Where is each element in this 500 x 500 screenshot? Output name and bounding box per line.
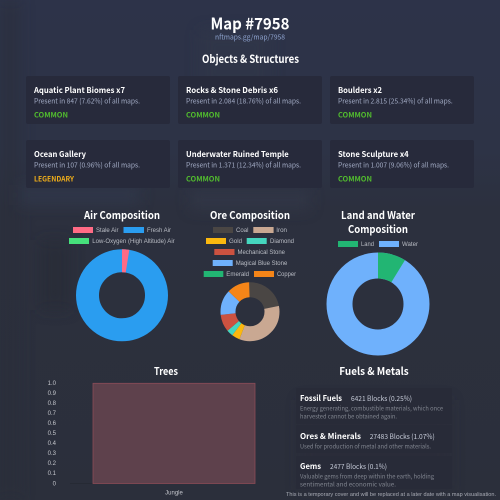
card: gems: Valuable gems from deep within the earth, holding (300, 471, 435, 480)
card: fossil fuels (296, 388, 452, 424)
card: underwater ruined temple: Present in 1.371 (12.34%) of all maps. (186, 160, 301, 170)
panel: objects and structures cards (26, 76, 474, 188)
card: ocean gallery: Ocean Gallery (34, 149, 86, 160)
legend: land and water: Land (361, 241, 374, 248)
card: stone sculpture: Present in 1.007 (9.06%) of all maps. (338, 160, 449, 170)
heading: trees: Trees (154, 364, 178, 379)
panel: fuels and metals (296, 364, 452, 489)
card: aquatic plant biomes: Aquatic Plant Biomes x7 (33, 85, 125, 96)
heading: air composition: Air Composition (83, 208, 160, 223)
bar chart: trees: Jungle (165, 490, 184, 496)
card: fossil fuels: harvested cannot be obtained again. (300, 412, 397, 421)
card: boulders: Boulders x2 (338, 85, 382, 96)
card: underwater ruined temple (178, 140, 322, 188)
card: ores and minerals: Ores & Minerals (300, 431, 361, 442)
panel: land and water composition (338, 208, 419, 342)
donut chart: air (88, 261, 156, 330)
card: rocks and stone debris: Rocks & Stone Debris x6 (186, 85, 278, 96)
heading: objects and structures: Objects & Structures (202, 51, 299, 67)
legend: air (69, 227, 176, 245)
bar chart: trees: 0.4 (48, 441, 57, 447)
card: fossil fuels: Fossil Fuels (300, 393, 342, 404)
card: fossil fuels: 6421 Blocks (0.25%) (351, 394, 412, 404)
bar chart: trees: 0.2 (48, 461, 57, 467)
card: ores and minerals: 27483 Blocks (1.07%) (370, 432, 435, 442)
panel: air composition (69, 208, 176, 330)
legend: ore: Magical Blue Stone (236, 260, 288, 267)
legend: land and water (338, 241, 419, 248)
card: aquatic plant biomes (26, 76, 170, 124)
card: fossil fuels: Energy generating, combustible materials, which once (300, 403, 444, 412)
card: aquatic plant biomes: Present in 847 (7.62%) of all maps. (34, 96, 140, 106)
card: ores and minerals: Used for production of metal and other materials. (300, 442, 431, 450)
card: stone sculpture: COMMON (338, 174, 372, 184)
legend: air: Fresh Air (147, 227, 172, 234)
legend: ore: Emerald (226, 271, 249, 278)
card: gems: 2477 Blocks (0.1%) (330, 462, 387, 472)
bar chart: trees: 0.8 (48, 401, 57, 407)
bar chart: trees (48, 381, 255, 496)
bar chart: trees: 0 (53, 482, 57, 488)
bar chart: trees: 0.9 (48, 391, 57, 397)
card: rocks and stone debris: Present in 2.084 (18.76%) of all maps. (186, 96, 301, 106)
legend: ore: Coal (236, 227, 248, 234)
bar chart: trees: 0.6 (48, 421, 57, 427)
card: boulders (330, 76, 474, 124)
bar chart: trees: 0.7 (48, 411, 57, 417)
card: rocks and stone debris: COMMON (186, 110, 220, 120)
heading: ore composition: Ore Composition (210, 208, 290, 223)
bar chart: trees: 0.5 (48, 431, 57, 437)
bar chart: trees: 0.1 (48, 471, 57, 477)
card: boulders: Present in 2.815 (25.34%) of all maps. (338, 96, 453, 106)
bar chart: trees: 0.3 (48, 451, 57, 457)
card: stone sculpture (330, 140, 474, 188)
card: stone sculpture: Stone Sculpture x4 (338, 149, 409, 160)
heading: land and water composition (341, 208, 415, 237)
panel: trees (48, 364, 255, 496)
card: aquatic plant biomes: COMMON (34, 110, 68, 120)
legend: land and water: Water (402, 241, 419, 248)
heading: fuels and metals: Fuels & Metals (339, 364, 409, 379)
card: ocean gallery: LEGENDARY (34, 174, 75, 184)
card: gems (296, 456, 452, 489)
legend: ore: Iron (276, 227, 287, 234)
donut chart: land and water (340, 266, 416, 342)
legend: air: Low-Oxygen (High Altitude) Air (92, 238, 176, 245)
card: underwater ruined temple: Underwater Ruined Temple (186, 149, 289, 160)
card: rocks and stone debris (178, 76, 322, 124)
legend: ore: Mechanical Stone (238, 249, 285, 256)
card: ores and minerals (296, 425, 452, 453)
legend: ore (204, 227, 297, 278)
card: gems: Gems (300, 461, 321, 472)
legend: ore: Diamond (270, 238, 294, 245)
card: ocean gallery: Present in 107 (0.96%) of all maps. (34, 160, 140, 170)
heading: land and water composition: Land and Water (341, 208, 415, 223)
card: gems: sentimental and economic value. (300, 480, 396, 489)
footer note: This is a temporary cover and will be replaced at a later date with a map visualisation. (286, 492, 496, 498)
panel: ore composition (204, 208, 297, 334)
card: underwater ruined temple: COMMON (186, 174, 220, 184)
heading: land and water composition: Composition (348, 222, 408, 237)
bar chart: trees: 1.0 (48, 381, 57, 387)
legend: air: Stale Air (96, 227, 119, 234)
donut chart: ore (228, 290, 272, 334)
legend: ore: Gold (229, 238, 242, 245)
card: ocean gallery (26, 140, 170, 188)
legend: ore: Copper (277, 271, 297, 278)
card: boulders: COMMON (338, 110, 372, 120)
map link: nftmaps.gg/map/7958 (215, 32, 285, 42)
title: Map #7958 (210, 10, 290, 34)
